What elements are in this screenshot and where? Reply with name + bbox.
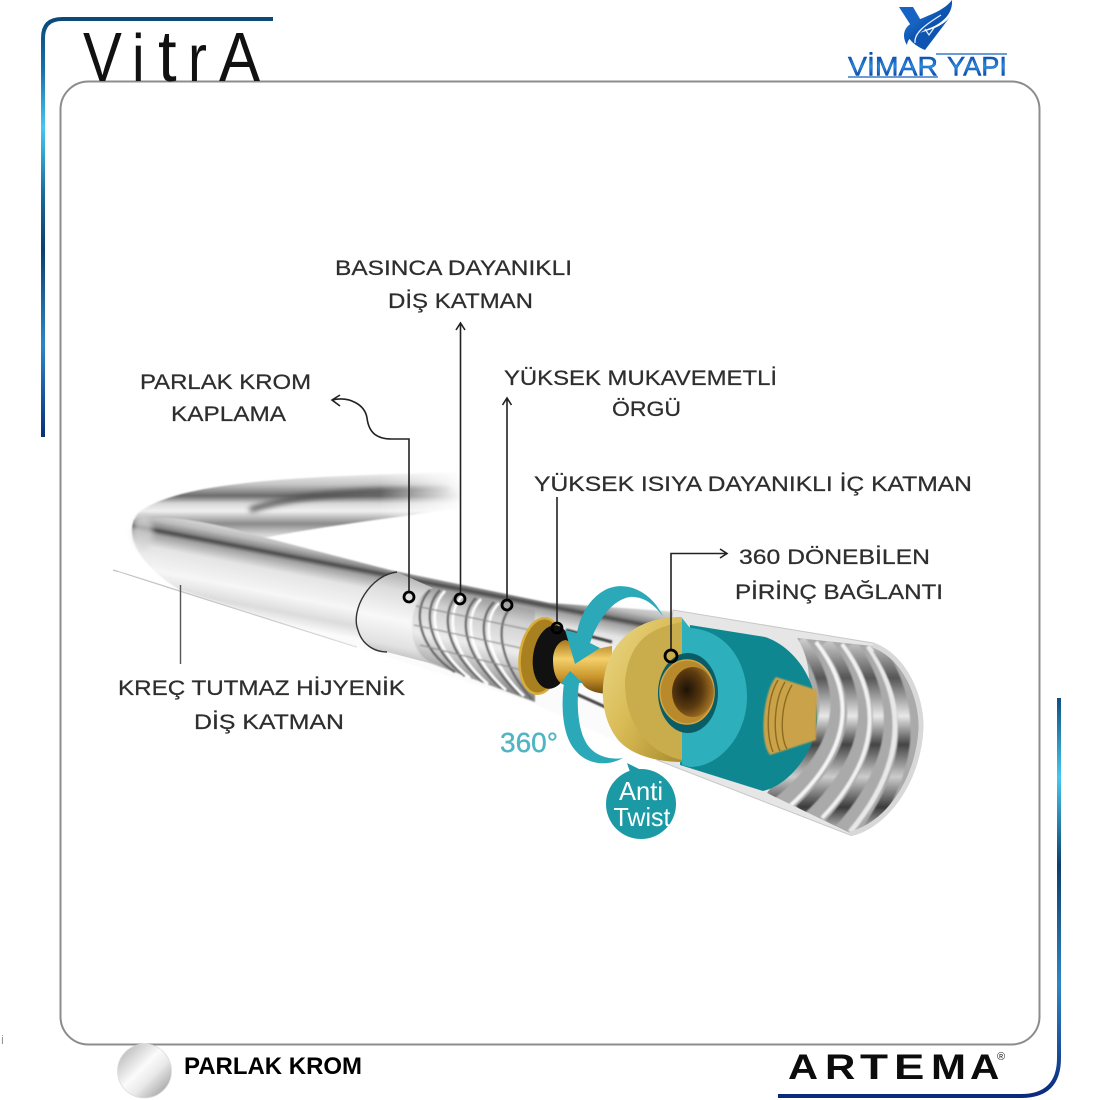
hose: brass connector	[553, 640, 612, 694]
hose: gold ring and black inner layer	[515, 615, 575, 697]
callout: parlak krom kaplama: KAPLAMA	[171, 403, 286, 426]
callout: parlak krom kaplama	[140, 371, 414, 602]
brass nut	[660, 660, 714, 724]
logo: Artema: E	[894, 1047, 924, 1087]
teal half ring	[682, 618, 747, 767]
logo: Artema: ®	[997, 1051, 1005, 1063]
wordmark: VİMAR YAPI: YAPI	[947, 52, 1007, 82]
callout: basınca dayanıklı dış katman	[335, 257, 572, 604]
logo: Artema: R	[825, 1048, 855, 1087]
callout: kireç tutmaz hijyenik dış katman: KREÇ TUTMAZ HİJYENİK	[118, 677, 405, 700]
hose: main chrome body	[132, 518, 680, 762]
finish name: PARLAK KROM	[184, 1053, 362, 1080]
logo: VitrA: t	[158, 16, 177, 97]
frame: bottom-right blue bracket	[778, 698, 1059, 1096]
logo: Vimar Yapi	[848, 0, 1007, 82]
teal interior	[680, 625, 817, 791]
callout: basınca dayanıklı dış katman: BASINCA DAYANIKLI	[335, 257, 572, 280]
hose: sheath section	[356, 572, 433, 664]
bore dark ring	[658, 653, 718, 733]
label: 360 degrees: 360°	[500, 727, 558, 758]
frame: top-left blue bracket	[43, 19, 273, 437]
callout: basınca dayanıklı dış katman: DİŞ KATMAN	[388, 290, 533, 313]
callout: parlak krom kaplama: PARLAK KROM	[140, 371, 311, 394]
logo: VitrA: V	[83, 18, 122, 96]
hose: soft bend highlight	[133, 514, 153, 550]
logo: VitrA: r	[188, 22, 207, 96]
logo: Artema: A	[970, 1049, 999, 1087]
callout: yüksek mukavemetli örgü: YÜKSEK MUKAVEMETLİ	[504, 367, 777, 390]
badge: Anti Twist: Anti	[619, 776, 663, 806]
logo: Artema	[788, 1047, 1005, 1087]
icon: Vimar V mark	[899, 0, 952, 50]
brass bore	[672, 667, 714, 717]
gold disc	[603, 617, 682, 762]
internal brass thread	[763, 677, 817, 755]
hose: open end tube	[657, 610, 922, 838]
callout: 360 dönebilen pirinç bağlantı: 360 DÖNEBİLEN	[739, 546, 930, 569]
hose: sheath cut edge	[356, 572, 397, 652]
logo: VitrA: A	[219, 17, 260, 96]
logo: Artema: M	[931, 1048, 966, 1087]
main panel	[60, 82, 1040, 1044]
swatch: chrome ball	[118, 1044, 172, 1098]
gold disc shaded face	[625, 622, 682, 760]
callout: yüksek ısıya dayanıklı iç katman: YÜKSEK ISIYA DAYANIKLI İÇ KATMAN	[534, 473, 972, 496]
badge: Anti Twist: Twist	[614, 802, 671, 832]
callout: yüksek mukavemetli örgü	[502, 367, 777, 610]
logo: VitrA: i	[132, 22, 145, 96]
hose: chrome stripes behind connector	[566, 630, 612, 710]
callout: 360 dönebilen pirinç bağlantı	[665, 546, 943, 662]
logo: Artema: A	[788, 1048, 818, 1087]
callout: 360 dönebilen pirinç bağlantı: PİRİNÇ BAĞLANTI	[735, 581, 943, 604]
arrow: 360 rotation top	[565, 586, 663, 664]
callout: kireç tutmaz hijyenik dış katman	[118, 585, 405, 734]
hose: braided layer	[412, 588, 535, 702]
arrow: 360 rotation bottom	[561, 671, 623, 763]
callout: yüksek ısıya dayanıklı iç katman	[534, 473, 972, 633]
wordmark: VİMAR YAPI	[848, 50, 1007, 82]
logo: VitrA	[83, 16, 260, 97]
callout: kireç tutmaz hijyenik dış katman: DİŞ KATMAN	[194, 711, 344, 734]
badge: Anti Twist	[606, 763, 676, 839]
hose illustration	[113, 466, 922, 839]
callout: yüksek mukavemetli örgü: ÖRGÜ	[612, 398, 681, 421]
tube inner ribs	[770, 640, 904, 838]
logo: Artema: T	[860, 1047, 888, 1087]
wordmark: VİMAR YAPI: VİMAR	[848, 50, 938, 82]
tube rim highlight	[850, 645, 921, 834]
hose: far bend section	[133, 466, 465, 538]
small stray mark: İ	[1, 1034, 4, 1047]
hose: thin rod reflection	[113, 570, 360, 651]
